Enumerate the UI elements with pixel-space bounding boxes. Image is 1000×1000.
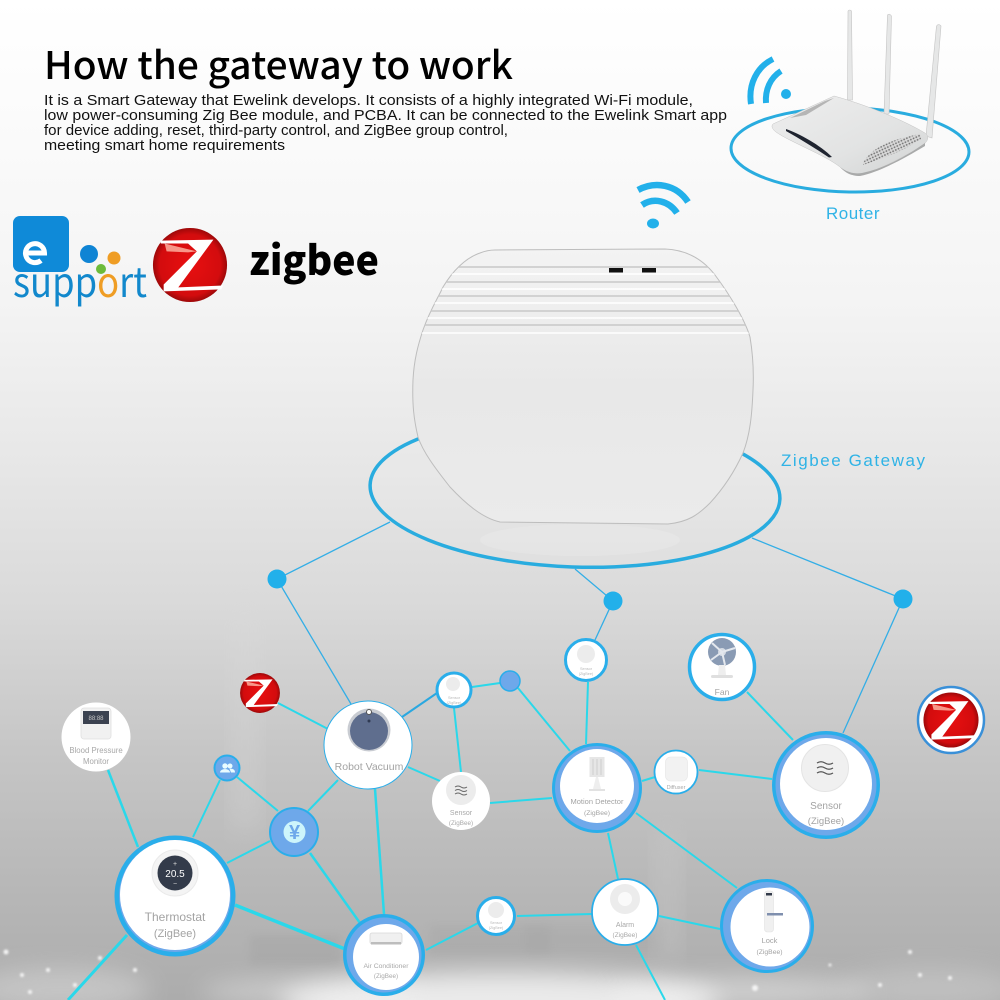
node: thermostat [114, 836, 236, 956]
node: yuan [270, 808, 318, 856]
node: thermostat: Thermostat [145, 910, 206, 924]
router device [772, 10, 941, 176]
node: people [214, 756, 240, 780]
node: sensor middle: Sensor [450, 810, 473, 817]
node: diffuser [654, 750, 698, 794]
node: thermostat: 20.5 [165, 869, 185, 880]
node: small sensor lower: (ZigBee) [489, 926, 504, 930]
node: sensor middle: (ZigBee) [449, 820, 473, 827]
node: motion detector: (ZigBee) [584, 810, 610, 817]
gateway ellipse [368, 410, 782, 574]
router ellipse [730, 106, 970, 194]
icon: ringed Z logo [918, 687, 984, 753]
logo: eWeLink support: support [13, 249, 147, 309]
node: blood pressure monitor [62, 702, 130, 772]
node: alarm: Alarm [616, 922, 634, 929]
node: small sensor top: (ZigBee) [579, 672, 594, 676]
gateway uplink lines and blue dots [268, 522, 912, 733]
router label: Router [826, 204, 880, 223]
node: air conditioner: (ZigBee) [374, 973, 398, 980]
intro text block: It is a Smart Gateway that Ewelink develops. It consists of a highly integrated Wi-Fi module, [44, 93, 693, 109]
logo: eWeLink support [13, 216, 147, 309]
node: small sensor top [566, 640, 606, 680]
node: air conditioner [343, 914, 425, 996]
title: How the gateway to work [44, 35, 513, 90]
node: small sensor upper [437, 673, 471, 707]
node: fan [690, 634, 754, 700]
network connection lines [68, 682, 793, 1000]
node: blood pressure monitor: Blood Pressure [69, 746, 123, 755]
node: small sensor upper: Sensor [448, 696, 461, 700]
icon: gateway wifi [638, 185, 688, 228]
node: alarm: (ZigBee) [613, 932, 637, 939]
node: yuan: ¥ [289, 822, 301, 844]
node: sensor middle [432, 772, 490, 830]
node: small sensor lower: Sensor [490, 921, 503, 925]
node: lock: (ZigBee) [756, 949, 783, 956]
gateway label: Zigbee Gateway [781, 451, 926, 470]
node: blue dot [500, 671, 520, 691]
node: small sensor upper: (ZigBee) [447, 701, 462, 705]
node: blood pressure monitor: 88:88 [88, 716, 104, 722]
node: big sensor: Sensor [810, 801, 843, 812]
node: diffuser: Diffuser [667, 785, 686, 791]
node: thermostat: − [173, 881, 177, 888]
node: big sensor: (ZigBee) [808, 816, 844, 827]
node: big sensor [772, 731, 880, 839]
node: small sensor lower [478, 898, 514, 934]
intro text block: low power-consuming Zig Bee module, and PCBA. It can be connected to the Ewelink Smart app [44, 108, 727, 124]
node: fan: Fan [715, 687, 730, 697]
intro text block: meeting smart home requirements [44, 138, 285, 154]
logo: red Z sphere [153, 228, 227, 302]
intro text block: for device adding, reset, third-party control, and ZigBee group control, [44, 123, 508, 139]
node: lock: Lock [762, 936, 778, 945]
city glow at bottom [0, 600, 1000, 1000]
intro text block [44, 93, 727, 154]
node: robot vacuum [324, 701, 412, 789]
node: motion detector [552, 743, 642, 833]
node: thermostat: (ZigBee) [154, 928, 196, 940]
node: thermostat: + [173, 861, 177, 868]
zigbee gateway device [412, 248, 754, 524]
icon: router wifi [750, 59, 791, 104]
node: alarm [592, 879, 658, 945]
node: motion detector: Motion Detector [571, 797, 624, 806]
node: small sensor top: Sensor [580, 667, 593, 671]
icon: small Z logo [240, 673, 280, 713]
node: air conditioner: Air Conditioner [364, 963, 409, 970]
node: blood pressure monitor: Monitor [83, 757, 109, 766]
node: lock [720, 879, 814, 973]
logo: zigbee wordmark: zigbee [249, 229, 379, 287]
node: robot vacuum: Robot Vacuum [335, 761, 404, 773]
